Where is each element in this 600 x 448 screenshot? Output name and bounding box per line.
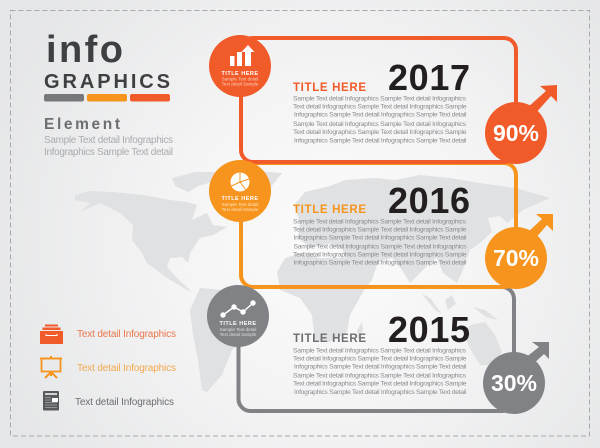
block: 2017 text: Infographics Sample Text detail Infographics Sample Text detail [294, 138, 467, 144]
block: 2016 text: Infographics Sample Text detail Infographics Sample Text detail [294, 234, 467, 242]
block: 2017 text: Text detail Infographics Sample Text detail Infographics Sample [293, 129, 467, 136]
badge: 2015 [207, 285, 269, 347]
block: 2016 text: TITLE HERE [293, 204, 366, 216]
badge: 2016 [209, 160, 271, 222]
badge text: Text detail Sample [222, 82, 259, 86]
intro text: Sample Text detail Infographics [44, 135, 173, 146]
callout: 30% [483, 342, 549, 414]
block: 2016 text [293, 180, 470, 266]
block: 2017 text: Infographics Sample Text detail Infographics Sample Text detail [294, 112, 467, 118]
element heading: Element [44, 116, 120, 133]
legend item: drawer [40, 324, 176, 344]
block: 2015 text: TITLE HERE [293, 333, 366, 345]
block: 2015 text [293, 309, 470, 396]
badge title: TITLE HERE [221, 196, 259, 202]
badge text: Sample Text detail [220, 327, 256, 332]
icon: rising bars [230, 45, 254, 66]
callout: 30%: 30% [491, 370, 537, 396]
legend text: Text detail Infographics [77, 363, 176, 374]
block: 2017 text: 2017 [388, 57, 470, 98]
block: 2017 text: Sample Text detail Infographics Sample Text detail Infographics [293, 121, 467, 128]
block: 2017 text: Sample Text detail Infographics Sample Text detail Infographics [293, 96, 467, 102]
legend text: Text detail Infographics [77, 329, 176, 340]
panel: 2016 frame [241, 163, 516, 287]
icon: line graph [221, 301, 255, 317]
block: 2017 text [293, 57, 470, 144]
block: 2016 text: Sample Text detail Infographics Sample Text detail Infographics [294, 244, 467, 250]
block: 2015 text: Sample Text detail Infographics Sample Text detail Infographics [293, 372, 467, 380]
block: 2015 text: Infographics Sample Text detail Infographics Sample Text detail [294, 389, 467, 396]
block: 2017 text: TITLE HERE [293, 82, 366, 94]
panel: 2017 frame [241, 38, 516, 162]
block: 2016 text: 2016 [388, 180, 470, 221]
badge: 2017 [209, 35, 271, 97]
title: info graphics [44, 29, 170, 93]
badge text [222, 202, 259, 212]
badge title: TITLE HERE [221, 71, 259, 77]
badge text: Text detail Sample [222, 207, 259, 212]
callout: 70% [485, 214, 553, 289]
block: 2015 text: Sample Text detail Infographics Sample Text detail Infographics [293, 348, 467, 354]
block: 2016 text: Text detail Infographics Sample Text detail Infographics Sample [293, 226, 467, 234]
block: 2015 text: 2015 [388, 309, 470, 350]
title: info graphics: GRAPHICS [44, 71, 170, 93]
icon: drawer [40, 324, 63, 344]
title: info graphics: info [46, 29, 123, 71]
legend item: newspaper [43, 391, 174, 410]
badge text: Text detail Sample [220, 332, 257, 337]
icon: pie chart [230, 172, 250, 192]
panel: 2015 frame [238, 287, 514, 411]
callout: 90% [485, 85, 557, 164]
callout: 90%: 90% [493, 120, 539, 146]
block: 2015 text: Text detail Infographics Sample Text detail Infographics Sample [293, 380, 467, 388]
title colour bars [44, 94, 170, 102]
intro text [44, 135, 173, 158]
block: 2017 text: Text detail Infographics Sample Text detail Infographics Sample [293, 104, 467, 110]
badge title: TITLE HERE [219, 321, 257, 327]
icon: projector board [40, 356, 62, 378]
world map [75, 170, 550, 392]
block: 2016 text: Infographics Sample Text detail Infographics Sample Text detail [294, 260, 467, 266]
legend item: projector [40, 356, 176, 378]
badge text [220, 327, 257, 337]
block: 2015 text: Text detail Infographics Sample Text detail Infographics Sample [293, 356, 467, 362]
badge text [222, 76, 259, 86]
block: 2016 text: Sample Text detail Infographics Sample Text detail Infographics [293, 218, 467, 226]
callout: 70%: 70% [493, 245, 539, 271]
badge text: Sample Text detail [222, 202, 258, 207]
intro text: Infographics Sample Text detail [44, 147, 173, 158]
badge text: Sample Text detail [222, 76, 258, 82]
block: 2016 text: Text detail Infographics Sample Text detail Infographics Sample [293, 252, 467, 258]
block: 2015 text: Infographics Sample Text detail Infographics Sample Text detail [294, 364, 467, 370]
icon: newspaper [43, 391, 59, 410]
legend text: Text detail Infographics [75, 397, 174, 408]
